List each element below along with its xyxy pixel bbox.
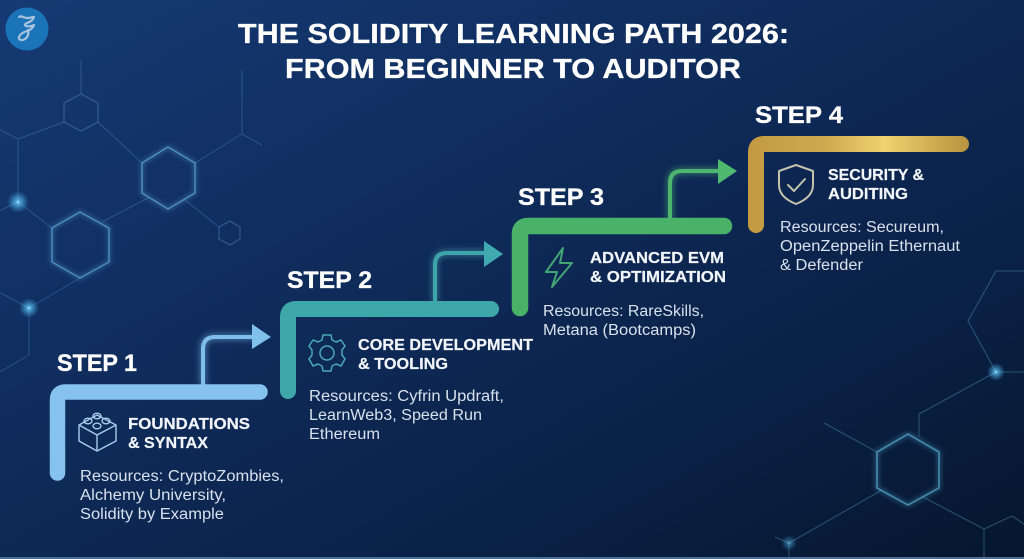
step 1 resources bbox=[80, 468, 284, 523]
step 2 arrow bbox=[435, 241, 503, 302]
step 4 resources: Resources: Secureum, bbox=[780, 219, 944, 236]
step 1 resources: Alchemy University, bbox=[80, 487, 226, 504]
step 2 heading bbox=[358, 337, 534, 373]
step 3 arrow bbox=[670, 159, 737, 219]
step 4 bracket bbox=[756, 144, 961, 225]
step 2 heading: CORE DEVELOPMENT bbox=[358, 337, 534, 354]
step 3 heading: & OPTIMIZATION bbox=[590, 269, 726, 286]
step 4 resources: OpenZeppelin Ethernaut bbox=[780, 238, 961, 255]
panel: step 1 bbox=[57, 324, 284, 523]
step 1 arrow bbox=[203, 324, 271, 385]
title: THE SOLIDITY LEARNING PATH 2026: bbox=[238, 18, 789, 49]
panel: step 3 bbox=[518, 159, 737, 339]
hexagon network: top left bbox=[0, 60, 262, 372]
icon: lightning bolt bbox=[546, 248, 572, 287]
step 2 resources bbox=[309, 388, 504, 443]
step 2 resources: Resources: Cyfrin Updraft, bbox=[309, 388, 504, 405]
step 2 bracket bbox=[288, 309, 491, 391]
step 2 resources: LearnWeb3, Speed Run bbox=[309, 407, 482, 424]
step 2 label: STEP 2 bbox=[287, 267, 372, 294]
title bbox=[238, 18, 789, 84]
step 1 bracket bbox=[58, 392, 260, 473]
panel: step 4 bbox=[755, 102, 961, 274]
step 4 heading: AUDITING bbox=[828, 186, 908, 203]
step 3 resources: Metana (Bootcamps) bbox=[543, 322, 696, 339]
step 3 resources bbox=[543, 303, 704, 339]
title: FROM BEGINNER TO AUDITOR bbox=[285, 53, 741, 84]
step 3 heading bbox=[590, 250, 726, 286]
icon: gear bbox=[309, 335, 345, 371]
step 1 label: STEP 1 bbox=[57, 350, 137, 377]
step 4 resources: & Defender bbox=[780, 257, 863, 274]
icon: shield check bbox=[779, 165, 813, 204]
step 2 heading: & TOOLING bbox=[358, 356, 448, 373]
step 3 bracket bbox=[520, 226, 724, 308]
step 1 heading: & SYNTAX bbox=[128, 435, 209, 452]
panel: step 2 bbox=[287, 241, 534, 443]
step 4 label: STEP 4 bbox=[755, 102, 844, 129]
step 3 resources: Resources: RareSkills, bbox=[543, 303, 704, 320]
step 1 heading bbox=[128, 416, 250, 452]
logo badge bbox=[6, 8, 48, 50]
step 4 heading: SECURITY & bbox=[828, 167, 924, 184]
icon: building block bbox=[79, 413, 116, 451]
step 1 resources: Resources: CryptoZombies, bbox=[80, 468, 284, 485]
hexagon network: bottom right bbox=[775, 271, 1024, 559]
step 3 heading: ADVANCED EVM bbox=[590, 250, 724, 267]
step 1 resources: Solidity by Example bbox=[80, 506, 224, 523]
step 4 resources bbox=[780, 219, 961, 274]
step 3 label: STEP 3 bbox=[518, 184, 604, 211]
step 1 heading: FOUNDATIONS bbox=[128, 416, 250, 433]
step 4 heading bbox=[828, 167, 924, 203]
step 2 resources: Ethereum bbox=[309, 426, 380, 443]
